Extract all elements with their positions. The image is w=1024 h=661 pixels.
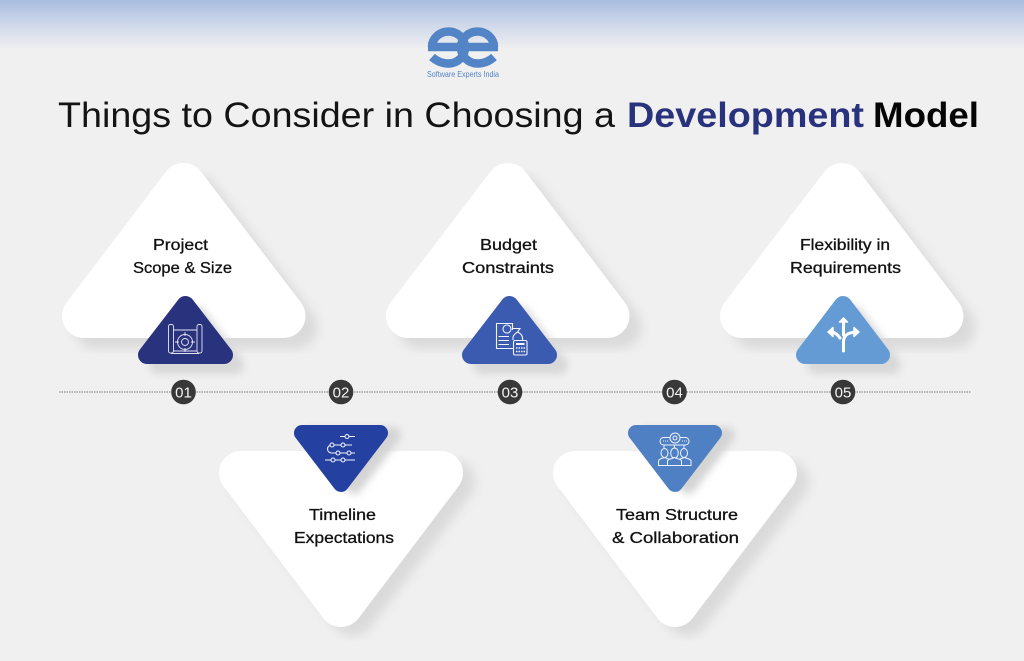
panel: timeline expectations: [241, 433, 453, 614]
title: Model: [873, 96, 979, 135]
label: team structure and collaboration: [612, 507, 739, 547]
label: budget constraints: [462, 237, 554, 277]
number badge 01: 01: [175, 384, 192, 402]
icon: blueprint target: [168, 324, 202, 354]
label: team structure and collaboration: & Collaboration: [612, 530, 739, 547]
icon: branching arrows: [828, 318, 859, 351]
title: Development: [627, 96, 864, 135]
number badge 02: 02: [333, 384, 349, 402]
number badge 05: 05: [835, 384, 851, 402]
icon: budget document and calculator: [496, 324, 527, 355]
number badge 03: [498, 380, 522, 404]
panel: project scope and size: [84, 185, 296, 365]
label: timeline expectations: Timeline: [309, 507, 376, 524]
label: project scope and size: Project: [153, 237, 209, 254]
title: [58, 96, 979, 135]
label: flexibility in requirements: Requirements: [790, 260, 901, 277]
title: Things to Consider in Choosing a: [58, 96, 616, 135]
icon: team with gear: [658, 433, 691, 466]
label: budget constraints: Constraints: [462, 260, 554, 277]
logo: Software Experts India: [427, 70, 499, 79]
number badge 04: 04: [666, 384, 683, 402]
label: budget constraints: Budget: [480, 237, 538, 254]
number badge 01: [171, 380, 196, 404]
panel: budget constraints: [408, 185, 620, 365]
number badge 03: 03: [502, 384, 518, 402]
number badge 04: [662, 380, 687, 404]
label: timeline expectations: Expectations: [294, 530, 394, 547]
number badge 02: [329, 380, 353, 404]
label: timeline expectations: [294, 507, 394, 547]
label: flexibility in requirements: [790, 237, 901, 277]
label: project scope and size: [133, 237, 232, 277]
panel: flexibility in requirements: [742, 185, 954, 365]
label: team structure and collaboration: Team Structure: [616, 507, 738, 524]
number badge 05: [831, 380, 855, 404]
label: flexibility in requirements: Flexibility in: [800, 237, 890, 254]
timeline divider: [59, 391, 971, 393]
icon: timeline path: [325, 434, 355, 462]
panel: team structure and collaboration: [575, 433, 787, 614]
label: project scope and size: Scope & Size: [133, 260, 232, 277]
logo: [427, 32, 499, 79]
